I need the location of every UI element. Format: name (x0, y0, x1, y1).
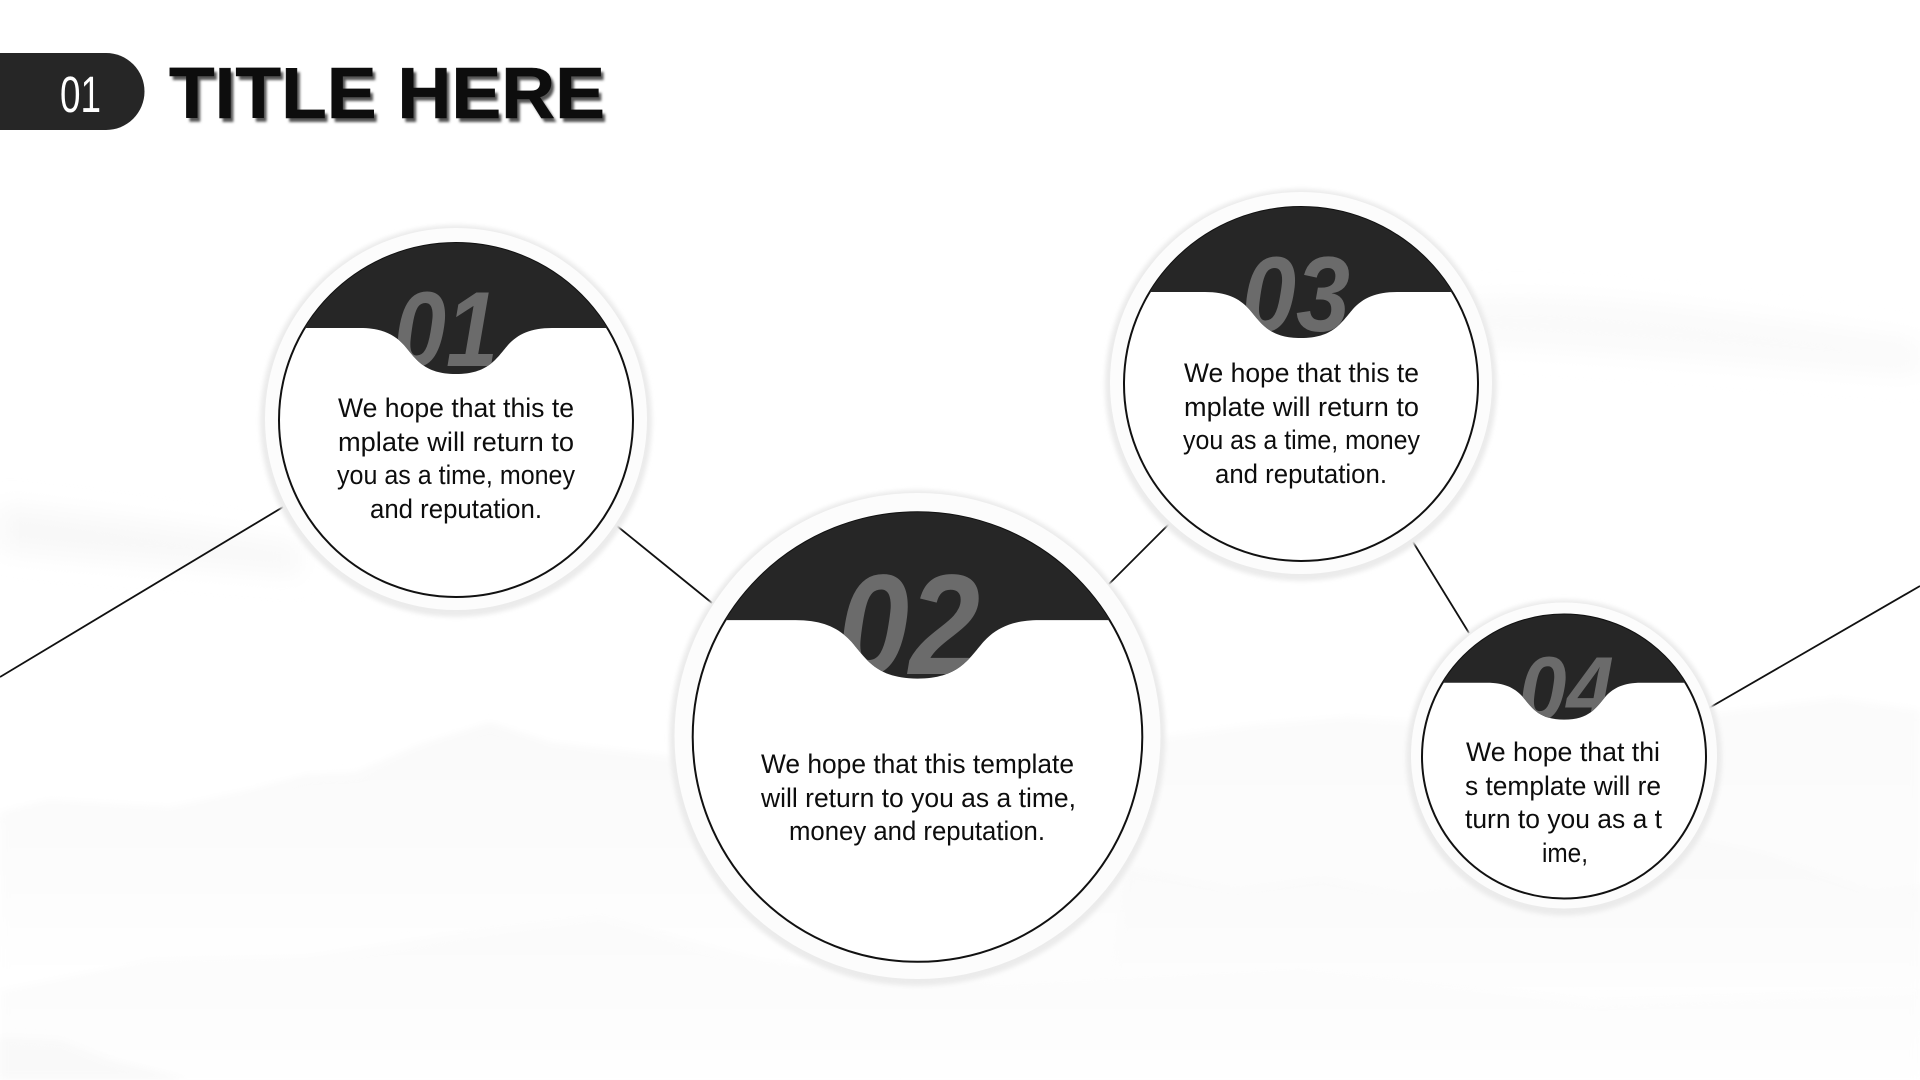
circle 03 text (1183, 358, 1421, 489)
circle 02 text: will return to you as a time, (760, 783, 1076, 813)
circle 03 text: you as a time, money (1183, 425, 1421, 455)
circle 01 dark cap (305, 243, 607, 374)
header pill number: 01 (60, 66, 101, 123)
circle 04 number: 04 (1519, 639, 1614, 740)
circle 02 text: We hope that this template (761, 749, 1074, 779)
connector lines (0, 507, 1920, 708)
circle 01 text (337, 393, 576, 524)
circle 04 text (1465, 737, 1663, 868)
circle 01 text: We hope that this te (338, 393, 574, 423)
circle 02 dark cap (725, 512, 1110, 679)
circle 03 text: and reputation. (1215, 459, 1387, 489)
panel: circle 04 (1406, 600, 1722, 916)
circle 02 number: 02 (838, 546, 980, 705)
circle 04 text: ime, (1542, 838, 1588, 868)
background: ink wash mountains (0, 298, 1920, 1080)
circle 04 text: We hope that thi (1466, 737, 1660, 767)
circle 03 dark cap (1150, 207, 1452, 338)
header pill (0, 53, 144, 130)
panel: circle 01 (260, 225, 652, 617)
circle 04 text: turn to you as a t (1465, 804, 1663, 834)
title: TITLE HERE (169, 54, 605, 134)
circle 02 text: money and reputation. (789, 816, 1045, 846)
panel: circle 02 (670, 490, 1166, 986)
circle 04 dark cap (1443, 615, 1685, 720)
circle 03 text: We hope that this te (1184, 358, 1419, 388)
circle 01 text: you as a time, money (337, 460, 576, 490)
circle 01 text: and reputation. (370, 494, 542, 524)
circle 01 text: mplate will return to (338, 427, 574, 457)
circle 01 number: 01 (394, 269, 498, 389)
circle 04 text: s template will re (1465, 771, 1661, 801)
circle 03 number: 03 (1242, 234, 1350, 354)
circle 03 text: mplate will return to (1184, 392, 1419, 422)
circle 02 text (760, 749, 1076, 846)
title: TITLE HERE (172, 58, 608, 138)
panel: circle 03 (1105, 189, 1497, 581)
